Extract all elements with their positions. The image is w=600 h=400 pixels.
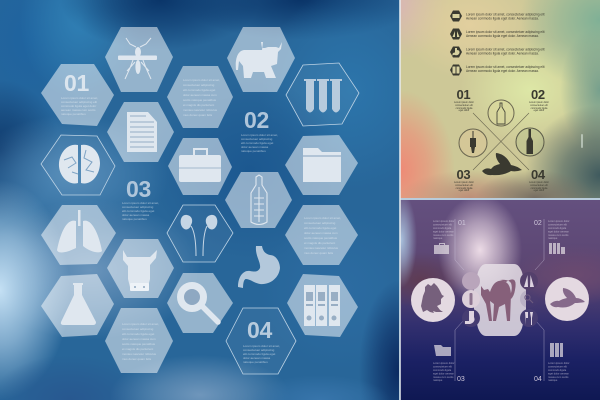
hexagon: 01 (41, 64, 114, 126)
text block 01: natoque (433, 236, 443, 240)
small circle: kidneys (520, 309, 538, 327)
icon: cow (236, 42, 282, 78)
text block: et magnis dis parturient (122, 347, 153, 351)
hexagon: briefcase (168, 138, 232, 195)
text blocks (454, 101, 549, 192)
text block 02: Lorem ipsum dolor (548, 219, 570, 223)
text block 04: eget dolor aenean (548, 372, 569, 376)
icon: wine bottle circle (516, 128, 544, 156)
text block 04: commodo ligula (548, 368, 567, 372)
text block: Lorem ipsum dolor sit amet, (183, 78, 220, 82)
number 04: 04 (534, 376, 542, 383)
text block: sociis natoque penatibus (122, 342, 156, 346)
text blocks: eget dolor (534, 189, 545, 192)
hexagon: mosquito (105, 27, 173, 92)
hexagon: thermometer (225, 172, 292, 228)
hexagon: text right (285, 205, 358, 265)
text blocks: commodo ligula (456, 187, 473, 190)
icon: thermometer (251, 175, 267, 224)
text block: et magnis dis parturient (304, 241, 335, 245)
icon: test tubes (304, 79, 342, 112)
number 02: 02 (534, 220, 542, 227)
text block: mus donec quam felis (122, 357, 152, 361)
text block: consectetuer adipiscing (122, 327, 154, 331)
text block: mus donec quam felis (304, 251, 334, 255)
text block 01: natoque penatibus (61, 112, 86, 116)
text block 02: natoque (548, 236, 558, 240)
text block 01: commodo ligula eget dolor (61, 104, 96, 108)
text block 02: natoque penatibus (241, 149, 266, 153)
hexagon: binders (287, 274, 358, 337)
text block (183, 78, 220, 117)
icon: bottle circle (488, 100, 514, 126)
list row 4: Lorem ipsum dolor sit amet, consectetuer adipiscing elit (466, 65, 545, 69)
hexagon: kidneys outline (167, 205, 233, 262)
text block: montes nascetur ridiculus (183, 108, 218, 112)
text block: dolor aenean massa cum (183, 93, 217, 97)
text block (304, 216, 341, 255)
icon: bull head (123, 250, 157, 291)
slider marks (581, 134, 583, 148)
icon: syringe circle (459, 129, 487, 157)
circle: turtle (545, 277, 589, 321)
text block 04: consectetuer adipiscing (243, 348, 275, 352)
text blocks: Lorem ipsum dolor (454, 181, 474, 184)
text blocks: eget dolor (459, 109, 470, 112)
icon: binders bottom (550, 343, 563, 357)
icon: cat (481, 279, 516, 321)
small circle: brain (462, 272, 480, 290)
number 04: 04 (247, 317, 272, 343)
list row 2 (450, 28, 545, 40)
number 01: 01 (64, 70, 89, 96)
list row 2: Lorem ipsum dolor sit amet, consectetuer adipiscing elit (466, 30, 545, 34)
text blocks: Lorem ipsum dolor (454, 101, 474, 104)
text block 01 (61, 96, 98, 116)
text block 04: natoque (548, 378, 558, 382)
text block: et magnis dis parturient (183, 103, 214, 107)
icon: binders top (549, 243, 565, 254)
text blocks: eget dolor (534, 109, 545, 112)
text block 03: commodo ligula (433, 368, 452, 372)
list row 1 (450, 10, 545, 22)
text blocks: Lorem ipsum dolor (529, 181, 549, 184)
text block: mus donec quam felis (183, 113, 213, 117)
icon: lungs (57, 210, 102, 252)
text block: montes nascetur ridiculus (122, 352, 157, 356)
text block 01: massa cum sociis (433, 233, 454, 237)
text block 02: consectetuer elit (548, 222, 567, 226)
number 02: 02 (531, 87, 545, 102)
text block 04: consectetuer elit (548, 364, 567, 368)
icon: briefcase (434, 243, 449, 254)
list row 1: Lorem ipsum dolor sit amet, consectetuer adipiscing elit (466, 12, 545, 16)
icon: stomach (238, 246, 280, 288)
hexagon: cow (227, 27, 295, 92)
list row 4 (450, 64, 545, 76)
number 01: 01 (456, 87, 470, 102)
text block: elit commodo ligula eget (304, 226, 337, 230)
text block 02: Lorem ipsum dolor sit amet, (241, 133, 278, 137)
text block 04 (548, 361, 570, 382)
text block 02: commodo ligula (548, 226, 567, 230)
text block: Lorem ipsum dolor sit amet, (122, 322, 159, 326)
text block 03: elit commodo ligula eget (122, 209, 155, 213)
list row 3 (450, 46, 545, 58)
text block 01: consectetuer adipiscing elit (61, 100, 97, 104)
text block: consectetuer adipiscing (304, 221, 336, 225)
number 01: 01 (458, 220, 466, 227)
icon: document (127, 112, 157, 152)
hexagon: test tubes outline (286, 63, 359, 126)
small circle: magnifier (520, 290, 538, 308)
text block 04: elit commodo ligula eget (243, 352, 276, 356)
text block 01: Lorem ipsum dolor (433, 219, 455, 223)
icon: kidneys (181, 215, 217, 256)
text block: dolor aenean massa cum (304, 231, 338, 235)
text block 03 (433, 361, 455, 382)
circle: rooster (411, 278, 455, 322)
text blocks: consectetuer elit (530, 184, 548, 187)
text block 02 (548, 219, 570, 240)
hexagon: folder (285, 135, 358, 195)
icon: brain (59, 145, 100, 183)
panel dividers (400, 0, 600, 400)
text block: elit commodo ligula eget (122, 332, 155, 336)
icon: folder (434, 345, 451, 356)
icon: mosquito (118, 38, 157, 79)
text block 03: Lorem ipsum dolor (433, 361, 455, 365)
text block: Lorem ipsum dolor sit amet, (304, 216, 341, 220)
icon: flask (61, 283, 96, 325)
list row 1: Aenean commodo ligula eget dolor. Aenean massa. (466, 16, 539, 20)
text blocks: consectetuer elit (455, 104, 473, 107)
text block 02 (241, 133, 278, 153)
text block: sociis natoque penatibus (304, 236, 338, 240)
text blocks: commodo ligula (531, 107, 548, 110)
text block 01: aenean massa cum sociis (61, 108, 96, 112)
text block 01: Lorem ipsum dolor sit amet, (61, 96, 98, 100)
hexagon: 04 outline (226, 308, 296, 374)
text block 02: consectetuer adipiscing (241, 137, 273, 141)
text block 04 (243, 344, 280, 364)
hexagon: document (107, 102, 174, 162)
text block 03: consectetuer adipiscing (122, 205, 154, 209)
text blocks: consectetuer elit (530, 104, 548, 107)
panel: main hexagon infographic (41, 27, 359, 374)
text block 04: Lorem ipsum dolor (548, 361, 570, 365)
list row 3: Aenean commodo ligula eget dolor. Aenean massa. (466, 52, 539, 56)
hexagon: text bottom (105, 308, 173, 373)
text blocks: commodo ligula (456, 107, 473, 110)
list row 4: Aenean commodo ligula eget dolor. Aenean massa. (466, 69, 539, 73)
icon: folder (303, 148, 341, 182)
number 03: 03 (126, 176, 151, 202)
text block: sociis natoque penatibus (183, 98, 217, 102)
text block 03: natoque penatibus (122, 217, 147, 221)
panel: main blue background (0, 0, 399, 400)
text blocks: Lorem ipsum dolor (529, 101, 549, 104)
icon: magnifier (180, 286, 218, 322)
hexagon: bull head (107, 239, 174, 298)
hexagon: brain outline (41, 135, 115, 195)
crossed lines (473, 113, 529, 170)
list row 3: Lorem ipsum dolor sit amet, consectetuer adipiscing elit (466, 48, 545, 52)
text block 01: commodo ligula (433, 226, 452, 230)
text block 03: natoque (433, 378, 443, 382)
text block 01: eget dolor aenean (433, 230, 454, 234)
text block 03 (122, 201, 159, 221)
hexagon: magnifier (167, 273, 233, 333)
text block 04: massa cum sociis (548, 375, 569, 379)
central plate (474, 264, 526, 336)
text block (122, 322, 159, 361)
text block: consectetuer adipiscing (183, 83, 215, 87)
text block 02: dolor aenean massa (241, 145, 269, 149)
text block 03: massa cum sociis (433, 375, 454, 379)
list row 2: Aenean commodo ligula eget dolor. Aenean massa. (466, 34, 539, 38)
text block 04: dolor aenean massa (243, 356, 271, 360)
text block 03: eget dolor aenean (433, 372, 454, 376)
text block 02: eget dolor aenean (548, 230, 569, 234)
number 03: 03 (456, 167, 470, 182)
icon list (450, 10, 545, 76)
connector lines (455, 219, 544, 381)
hexagon: flask (41, 274, 114, 337)
number 02: 02 (244, 107, 269, 133)
small circle: stomach (462, 309, 480, 327)
small circle: bottle (462, 290, 480, 308)
number 03: 03 (457, 376, 465, 383)
icon: turtle (550, 288, 585, 308)
text block 01 (433, 219, 455, 240)
hexagon: text top (167, 66, 233, 128)
icon: rooster (421, 283, 444, 313)
text block: elit commodo ligula eget (183, 88, 216, 92)
text block 02: massa cum sociis (548, 233, 569, 237)
panel: pastel infographic (400, 0, 600, 198)
text block: dolor aenean massa cum (122, 337, 156, 341)
text block 03: consectetuer elit (433, 364, 452, 368)
text blocks: commodo ligula (531, 187, 548, 190)
text blocks: eget dolor (459, 189, 470, 192)
icon: briefcase (179, 149, 221, 182)
text block: montes nascetur ridiculus (304, 246, 339, 250)
panel: purple infographic (400, 200, 600, 400)
small circle: lungs (520, 272, 538, 290)
text block 02: elit commodo ligula eget (241, 141, 274, 145)
text block 03: Lorem ipsum dolor sit amet, (122, 201, 159, 205)
text block 01: consectetuer elit (433, 222, 452, 226)
text block 03: dolor aenean massa (122, 213, 150, 217)
text block 04: natoque penatibus (243, 360, 268, 364)
hexagon: lungs (41, 205, 116, 265)
number 04: 04 (531, 167, 546, 182)
text blocks: consectetuer elit (455, 184, 473, 187)
icon: turtle (482, 153, 522, 175)
text block 04: Lorem ipsum dolor sit amet, (243, 344, 280, 348)
icon: binders (304, 285, 340, 326)
